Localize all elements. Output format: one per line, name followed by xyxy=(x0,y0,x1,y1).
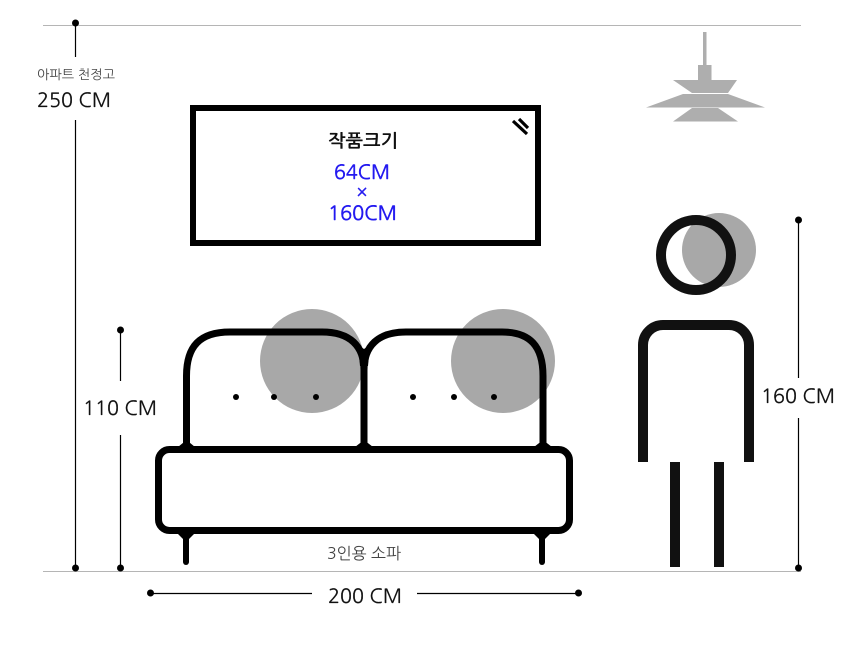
person head xyxy=(661,220,731,290)
sofa seat xyxy=(158,450,570,530)
artwork frame xyxy=(193,108,538,243)
sofa xyxy=(158,309,570,562)
person shadow circle xyxy=(682,213,756,287)
dimension: person height 160 CM: 160 CM xyxy=(761,386,835,406)
dimension: ceiling height 250 CM: 아파트 천정고 xyxy=(37,68,115,81)
artwork title: 작품크기 xyxy=(328,131,398,150)
sofa buttons xyxy=(233,394,497,400)
sofa caption: 3인용 소파 xyxy=(327,545,401,562)
sofa shadow circles xyxy=(260,309,364,413)
dimension: sofa height 110 CM: 110 CM xyxy=(83,398,157,418)
dimension: ceiling height 250 CM: 250 CM xyxy=(37,90,111,110)
person legs xyxy=(670,462,680,567)
artwork dimensions xyxy=(328,162,397,223)
icon: glass glare xyxy=(513,119,528,134)
person figure xyxy=(643,213,756,567)
sofa legs xyxy=(186,532,542,562)
person torso xyxy=(643,325,749,462)
artwork dimensions: × xyxy=(357,184,367,201)
artwork dimensions: 160CM xyxy=(328,203,397,223)
dimension: sofa width 200 CM xyxy=(147,586,582,606)
dimension: sofa height 110 CM xyxy=(83,326,157,572)
sofa backrest xyxy=(186,332,543,449)
dimension: person height 160 CM xyxy=(761,216,835,572)
dimension: ceiling height 250 CM xyxy=(37,20,115,572)
artwork dimensions: 64CM xyxy=(334,162,390,182)
icon: pendant lamp xyxy=(646,32,765,122)
dimension: sofa width 200 CM: 200 CM xyxy=(328,586,402,606)
